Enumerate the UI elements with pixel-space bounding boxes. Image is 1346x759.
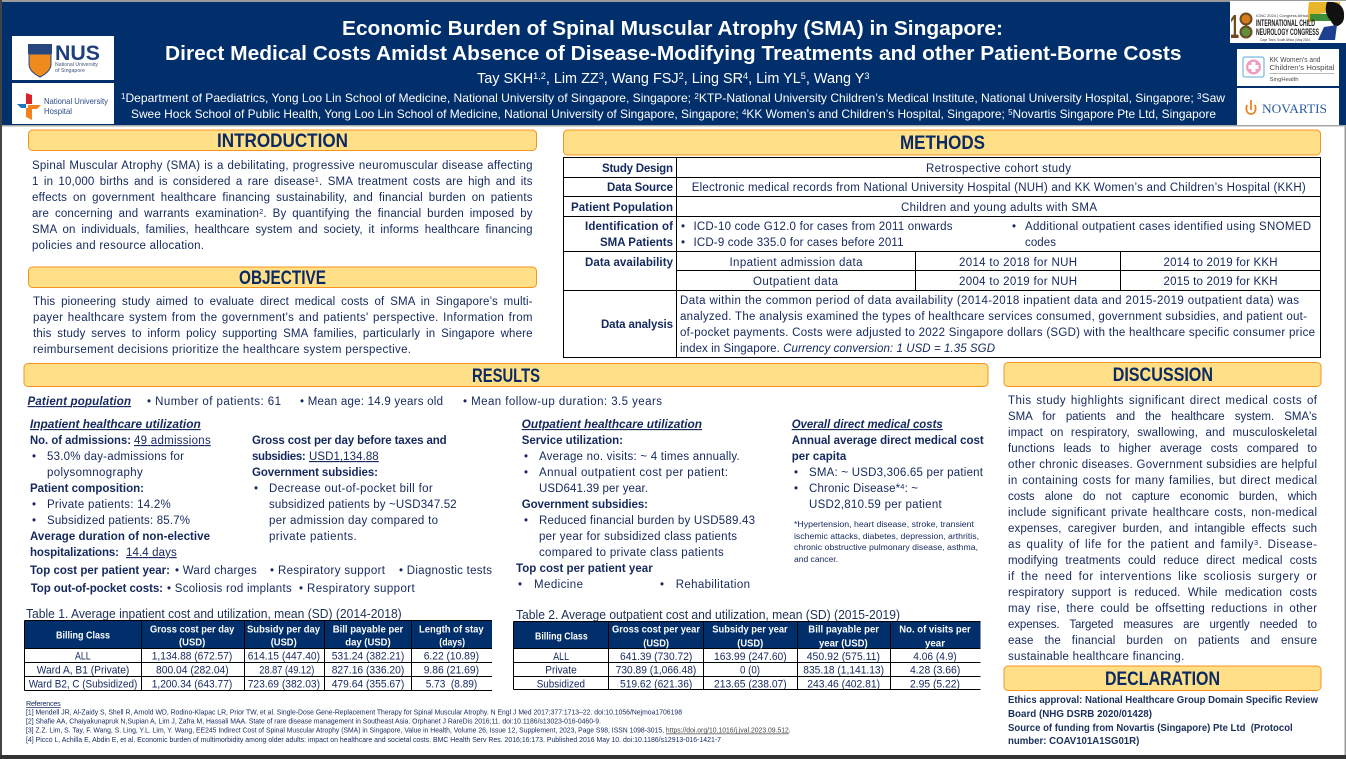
table 2: outpatient cost and utilization: 213.65 (238.07) xyxy=(714,678,787,690)
table 1: inpatient cost and utilization: 6.22 (10.89) xyxy=(424,650,479,662)
heading: results: RESULTS xyxy=(472,365,540,387)
heading: introduction xyxy=(28,130,536,152)
affiliations: Swee Hock School of Public Health, Yong Loo Lin School of Medicine, National University of Singapore, Singapore; xyxy=(131,107,743,121)
logo: International Child Neurology Congress: ICNC 2024 | Congress Africa xyxy=(1256,13,1309,18)
row: data analysis: Data analysis xyxy=(601,319,673,331)
table 1: inpatient cost and utilization: 28.87 (49.12) xyxy=(259,664,314,676)
text: introduction body: effects on government healthcare financing sustainability, and financial burden on patients xyxy=(32,192,533,204)
inpatient healthcare utilization: • xyxy=(32,451,36,463)
table 1: inpatient cost and utilization: 800.04 (282.04) xyxy=(156,664,229,676)
authors: 2 xyxy=(679,71,684,82)
heading: discussion xyxy=(1004,362,1321,386)
inpatient healthcare utilization: subsidies: xyxy=(252,451,306,463)
row: identification of SMA patients xyxy=(585,221,1311,249)
authors: , Lim ZZ xyxy=(546,70,599,87)
title xyxy=(165,17,1182,65)
logo: National University Hospital: Hospital xyxy=(44,106,72,116)
text: discussion body: ease the financial burden on patients and ensure xyxy=(1008,635,1317,647)
text: discussion body: other chronic diseases. Government subsidies are helpful xyxy=(1008,459,1317,471)
references xyxy=(26,699,791,744)
logo: National University Hospital: National University xyxy=(44,96,109,106)
inpatient healthcare utilization: Decrease out-of-pocket bill for xyxy=(269,483,433,495)
table 1: inpatient cost and utilization: 5.73 (8.89) xyxy=(426,678,477,690)
row: data availability: 2015 to 2019 for KKH xyxy=(1164,276,1278,288)
row: identification of SMA patients: ICD-10 code G12.0 for cases from 2011 onwards xyxy=(694,221,953,233)
table 2: outpatient cost and utilization: 835.18 (1,141.13) xyxy=(803,664,884,676)
overall direct medical costs: : ~ xyxy=(905,483,918,495)
outpatient healthcare utilization: Average no. visits: ~ 4 times annually. xyxy=(539,451,740,463)
table 2: outpatient cost and utilization: Billing Class xyxy=(535,630,588,642)
table 2: outpatient cost and utilization: Bill payable per xyxy=(808,624,879,636)
patient population summary xyxy=(28,396,662,408)
footnote: chronic diseases xyxy=(794,519,979,564)
row: data analysis: index in Singapore. Currency conversion: 1 USD = 1.35 SGD xyxy=(680,343,995,355)
row: identification of SMA patients: ICD-9 code 335.0 for cases before 2011 xyxy=(694,237,904,249)
outpatient healthcare utilization: USD641.39 per year. xyxy=(539,483,648,495)
affiliations: 3 xyxy=(1197,92,1202,101)
authors: 1,2 xyxy=(533,71,546,82)
heading: methods: METHODS xyxy=(900,132,985,154)
table 1: inpatient cost and utilization: 1,134.88 (672.57) xyxy=(152,650,232,662)
inpatient healthcare utilization: hospitalizations: xyxy=(30,547,119,559)
row: data source: Data Source xyxy=(607,182,673,194)
row: identification of SMA patients: Identification of xyxy=(585,221,673,233)
affiliations: Department of Paediatrics, Yong Loo Lin School of Medicine, National University of Singapore, Singapore; xyxy=(125,91,694,105)
table 2: outpatient cost and utilization: Private xyxy=(545,664,577,676)
text: introduction body: SMA on individuals, families, healthcare system and society, it informs healthcare financing xyxy=(32,224,532,236)
header banner xyxy=(2,1,1346,126)
text: introduction body: policies and resource allocation. xyxy=(32,240,204,252)
authors: 3 xyxy=(864,71,870,82)
text: discussion body: expenses. Targeted measures are urgently needed to xyxy=(1008,619,1317,631)
outpatient healthcare utilization: Service utilization: xyxy=(522,435,623,447)
logo: NUS xyxy=(12,36,114,80)
text: objective body xyxy=(33,296,533,356)
heading: objective: OBJECTIVE xyxy=(239,267,326,289)
row: patient population xyxy=(571,202,1097,214)
inpatient healthcare utilization: 53.0% day-admissions for xyxy=(47,451,184,463)
text: discussion body: may rise, there could be offsetting reductions in other xyxy=(1008,603,1317,615)
table 1: inpatient cost and utilization: 723.69 (382.03) xyxy=(248,678,320,690)
row: data availability: 2014 to 2019 for KKH xyxy=(1164,257,1278,269)
outpatient healthcare utilization: per year for subsidized class patients xyxy=(539,531,737,543)
panel: introduction xyxy=(28,130,536,252)
inpatient healthcare utilization: subsidized patients by ~USD347.52 xyxy=(269,499,457,511)
logo: KK Women's and Children's Hospital: SingHealth xyxy=(1270,77,1298,83)
footnote: chronic diseases: and cancer. xyxy=(794,554,838,564)
overall direct medical costs: USD2,810.59 per patient xyxy=(809,499,942,511)
overall direct medical costs: • xyxy=(794,483,798,495)
row: data analysis: of-pocket payments. Costs were adjusted to 2022 Singapore dollars (SGD) with the healthcare specific consumer price xyxy=(680,327,1315,339)
outpatient healthcare utilization: Outpatient healthcare utilization xyxy=(522,419,702,431)
table 2: outpatient cost and utilization: 519.62 (621.36) xyxy=(620,678,692,690)
inpatient healthcare utilization xyxy=(30,419,492,595)
row: data availability: Inpatient admission data xyxy=(730,257,863,269)
table 1: inpatient cost and utilization: (USD) xyxy=(271,636,297,648)
row: study design xyxy=(602,163,1071,175)
row: data availability xyxy=(585,257,1278,288)
logo: NUS: of Singapore xyxy=(55,68,85,74)
table 2: outpatient cost and utilization: (USD) xyxy=(737,638,763,650)
references: [1] Mendell JR, Al-Zaidy S, Shell R, Arnold WD, Rodino-Klapac LR, Prior TW, et al. Single-Dose Gene-Replacement Therapy for Spinal Muscular Atrophy. N Engl J Med 2017;377:1713–22. doi:10.1056/Nejmoa1706198 xyxy=(26,708,682,716)
overall direct medical costs: per capita xyxy=(792,451,847,463)
affiliations: KTP-National University Children’s Medical Institute, National University Hospital, Singapore; xyxy=(699,91,1197,105)
table 1: inpatient cost and utilization: Ward A, B1 (Private) xyxy=(37,664,129,676)
text: objective body: this study serves to inform policy supporting SMA families, particularly in Singapore where xyxy=(33,328,532,340)
patient population summary: Patient population xyxy=(28,396,131,408)
table 1: inpatient cost and utilization: 531.24 (382.21) xyxy=(332,650,404,662)
table 2: outpatient cost and utilization: (USD) xyxy=(643,638,669,650)
panel: declaration xyxy=(1004,666,1321,747)
outpatient healthcare utilization: • xyxy=(524,467,528,479)
text: discussion body: functions leads to higher average costs compared to xyxy=(1008,443,1317,455)
overall direct medical costs: Chronic Disease* xyxy=(809,483,900,495)
table 2: outpatient cost and utilization: 163.99 (247.60) xyxy=(714,651,787,663)
row: data analysis xyxy=(601,295,1315,355)
overall direct medical costs: 4 xyxy=(900,482,904,491)
inpatient healthcare utilization: • Scoliosis rod implants xyxy=(167,583,292,595)
row: identification of SMA patients: codes xyxy=(1025,237,1056,249)
table 2: outpatient cost and utilization: 641.39 (730.72) xyxy=(620,651,692,663)
authors: , Wang FSJ xyxy=(604,70,679,87)
table 2: outpatient cost and utilization: ALL xyxy=(553,651,569,663)
authors: , Ling SR xyxy=(684,70,743,87)
overall direct medical costs: • xyxy=(794,467,798,479)
text: discussion body: expenses, caregiver burden, and intangible effects such xyxy=(1008,523,1317,535)
affiliations: 1 xyxy=(121,92,126,101)
text: objective body: reimbursement decisions prioritize the healthcare system perspective. xyxy=(33,344,411,356)
text: discussion body xyxy=(1008,395,1318,663)
inpatient healthcare utilization: No. of admissions: xyxy=(30,435,131,447)
text: discussion body: respiratory support is reduced. While medication costs xyxy=(1008,587,1317,599)
heading: introduction: INTRODUCTION xyxy=(217,130,348,152)
table 2: outpatient cost and utilization: 4.28 (3.66) xyxy=(910,664,960,676)
logo: International Child Neurology Congress: 1 xyxy=(1230,8,1239,45)
text: discussion body: sustainable healthcare financing. xyxy=(1008,651,1184,663)
row: data availability: 2014 to 2018 for NUH xyxy=(959,257,1077,269)
inpatient healthcare utilization: • xyxy=(32,515,36,527)
panel: discussion xyxy=(1004,362,1321,663)
patient population summary: • Number of patients: 61 xyxy=(147,396,281,408)
row: patient population: Patient Population xyxy=(571,202,673,214)
logo: NUS: NUS xyxy=(55,42,100,65)
table 1: inpatient cost and utilization: Ward B2, C (Subsidized) xyxy=(29,678,137,690)
row: data source: Electronic medical records from National University Hospital (NUH) and KK Women’s and Children’s Hospital (KKH) xyxy=(692,182,1306,194)
references: References xyxy=(26,699,61,708)
table 1: inpatient cost and utilization: (days) xyxy=(439,636,465,648)
overall direct medical costs: Overall direct medical costs xyxy=(792,419,943,431)
table 1: inpatient cost and utilization: Table 1. Average inpatient cost and utilization, mean (SD) (2014-2018) xyxy=(26,607,402,621)
overall direct medical costs xyxy=(792,419,984,564)
inpatient healthcare utilization: private patients. xyxy=(269,531,357,543)
panel: results xyxy=(24,364,988,690)
table 2: outpatient cost and utilization: Subsidized xyxy=(537,678,585,690)
text: introduction body: 1 xyxy=(315,175,319,184)
inpatient healthcare utilization: polysomnography xyxy=(47,467,143,479)
text: introduction body: . By quantifying the financial burden imposed by xyxy=(263,208,533,220)
text: discussion body: 3 xyxy=(1254,538,1258,547)
text: discussion body: . Disease- xyxy=(1259,539,1317,551)
table 1: inpatient cost and utilization: day (USD) xyxy=(345,636,391,648)
text: introduction body: are concerning and warrants examination xyxy=(32,208,259,220)
logo: National University Hospital xyxy=(12,83,114,124)
affiliations: KK Women’s and Children’s Hospital, Singapore; xyxy=(746,107,1008,121)
outpatient healthcare utilization: Government subsidies: xyxy=(522,499,648,511)
text: declaration body: Ethics approval: National Healthcare Group Domain Specific Review xyxy=(1008,695,1318,706)
row: identification of SMA patients: • xyxy=(681,221,685,233)
panel: methods xyxy=(564,130,1320,358)
inpatient healthcare utilization: Average duration of non-elective xyxy=(30,531,210,543)
table 2: outpatient cost and utilization: No. of visits per xyxy=(899,624,971,636)
table 1: inpatient cost and utilization: 827.16 (336.20) xyxy=(332,664,404,676)
outpatient healthcare utilization: • xyxy=(524,515,528,527)
row: identification of SMA patients: • xyxy=(681,237,685,249)
table 2: outpatient cost and utilization xyxy=(514,608,980,690)
text: declaration body: number: COAV101A1SG01R) xyxy=(1008,736,1139,747)
patient population summary: • Mean age: 14.9 years old xyxy=(300,396,443,408)
text: discussion body: in containing costs for many families, but direct medical xyxy=(1008,475,1317,487)
text: declaration body: Source of funding from Novartis (Singapore) Pte Ltd (Protocol xyxy=(1008,723,1293,734)
text: objective body: This pioneering study aimed to evaluate direct medical costs of SMA in Singapore’s multi- xyxy=(33,296,533,308)
text: discussion body: modifying treatments could reduce direct medical costs xyxy=(1008,555,1317,567)
overall direct medical costs: Annual average direct medical cost xyxy=(792,435,984,447)
inpatient healthcare utilization: 14.4 days xyxy=(126,547,177,559)
logo: Novartis xyxy=(1237,88,1339,125)
table 2: outpatient cost and utilization: 0 (0) xyxy=(740,664,760,676)
inpatient healthcare utilization: • xyxy=(254,483,258,495)
patient population summary: • Mean follow-up duration: 3.5 years xyxy=(463,396,662,408)
heading: methods xyxy=(564,130,1320,155)
references: [3] Z.Z. Lim, S. Tay, F. Wang, S. Ling, Y.L. Lim, Y. Wang, EE245 Indirect Cost of Spinal Muscular Atrophy (SMA) in Singapore, Value in Health, Volume 26, Issue 12, Supplement, 2023, Page S98, ISSN 1098-3015, https://doi.org/10.1016/j.jval.2023.09.512. xyxy=(26,726,791,734)
outpatient healthcare utilization: compared to private class patients xyxy=(539,547,724,559)
outpatient healthcare utilization: • xyxy=(524,451,528,463)
row: identification of SMA patients: • xyxy=(1012,221,1016,233)
affiliations: 2 xyxy=(694,92,699,101)
logo: International Child Neurology Congress xyxy=(1230,1,1346,45)
table 1: inpatient cost and utilization: 614.15 (447.40) xyxy=(248,650,320,662)
text: discussion body: if the need for interventions like scoliosis surgery or xyxy=(1008,571,1317,583)
table 1: inpatient cost and utilization: ALL xyxy=(75,650,91,662)
table 2: outpatient cost and utilization: 243.46 (402.81) xyxy=(807,678,880,690)
affiliations: Novartis Singapore Pte Ltd, Singapore xyxy=(1013,107,1216,121)
logo: KK Women's and Children's Hospital xyxy=(1237,49,1339,86)
table 1: inpatient cost and utilization: 479.64 (355.67) xyxy=(332,678,404,690)
outpatient healthcare utilization: Annual outpatient cost per patient: xyxy=(539,467,728,479)
table 2: outpatient cost and utilization: year (USD) xyxy=(819,638,868,650)
table 2: outpatient cost and utilization: Gross cost per year xyxy=(612,624,700,636)
authors: 4 xyxy=(743,71,748,82)
outpatient healthcare utilization: • xyxy=(518,579,522,591)
logo: KK Women's and Children's Hospital: Children's Hospital xyxy=(1270,63,1335,72)
table 1: inpatient cost and utilization: Subsidy per day xyxy=(247,624,320,636)
row: patient population: Children and young adults with SMA xyxy=(901,202,1097,214)
outpatient healthcare utilization xyxy=(516,419,755,591)
inpatient healthcare utilization: Inpatient healthcare utilization xyxy=(30,419,201,431)
title: Direct Medical Costs Amidst Absence of Disease-Modifying Treatments and other Patient-Borne Costs xyxy=(165,42,1182,65)
table 2: outpatient cost and utilization: 4.06 (4.9) xyxy=(913,651,957,663)
affiliations: Saw xyxy=(1202,91,1225,105)
table 1: inpatient cost and utilization xyxy=(24,607,492,690)
inpatient healthcare utilization: • Respiratory support xyxy=(270,565,386,577)
heading: discussion: DISCUSSION xyxy=(1113,364,1213,386)
references: [2] Shafie AA, Chaiyakunapruk N,Supian A, Lim J, Zafra M, Hassali MAA. State of rare disease management in Southeast Asia. Orphanet J RareDis 2016;11. doi:10.1186/s13023-016-0460-9. xyxy=(26,716,601,726)
inpatient healthcare utilization: Patient composition: xyxy=(30,483,144,495)
row: identification of SMA patients: SMA Patients xyxy=(600,237,673,249)
inpatient healthcare utilization: • Respiratory support xyxy=(299,583,415,595)
table 1: inpatient cost and utilization: (USD) xyxy=(179,636,205,648)
text: discussion body: This study highlights significant direct medical costs of xyxy=(1008,395,1318,407)
authors: , Lim YL xyxy=(748,70,801,87)
table 2: outpatient cost and utilization: 450.92 (575.11) xyxy=(807,651,880,663)
methods table xyxy=(564,158,1320,358)
text: discussion body: include significant private healthcare costs, non-medical xyxy=(1008,507,1317,519)
text: discussion body: SMA for patients and the healthcare system. SMA's xyxy=(1008,411,1317,423)
footnote: chronic diseases: *Hypertension, heart disease, stroke, transient xyxy=(794,519,975,529)
inpatient healthcare utilization: Top out-of-pocket costs: xyxy=(31,583,163,595)
text: introduction body: 1 in 10,000 births and is considered a rare disease xyxy=(32,176,315,188)
heading: objective xyxy=(28,267,536,289)
row: study design: Retrospective cohort study xyxy=(926,163,1071,175)
affiliations: 4 xyxy=(742,108,747,117)
logo: International Child Neurology Congress: Cape Town, South Africa | May 2024 xyxy=(1260,37,1311,42)
logo: KK Women's and Children's Hospital: KK Women's and xyxy=(1270,55,1320,64)
table 1: inpatient cost and utilization: 9.86 (21.69) xyxy=(424,664,479,676)
table 2: outpatient cost and utilization: year xyxy=(925,638,945,650)
footnote: chronic diseases: chronic obstructive pulmonary disease, asthma, xyxy=(794,542,978,552)
inpatient healthcare utilization: Gross cost per day before taxes and xyxy=(252,435,447,447)
row: data analysis: Data within the common period of data availability (2014-2018 inpatient data and 2015-2019 outpatient data) was xyxy=(680,295,1299,307)
inpatient healthcare utilization: Subsidized patients: 85.7% xyxy=(47,515,190,527)
table 1: inpatient cost and utilization: Length of stay xyxy=(419,624,484,636)
inpatient healthcare utilization: 49 admissions xyxy=(134,435,211,447)
table 1: inpatient cost and utilization: Bill payable per xyxy=(333,624,403,636)
outpatient healthcare utilization: Top cost per patient year xyxy=(516,563,653,575)
heading: declaration xyxy=(1004,666,1321,690)
table 2: outpatient cost and utilization: 2.95 (5.22) xyxy=(910,678,960,690)
text: declaration body xyxy=(1008,695,1318,747)
text: introduction body xyxy=(32,160,533,252)
references: [4] Picco L, Achilla E, Abdin E, et al. Economic burden of multimorbidity among older adults: impact on healthcare and societal costs. BMC Health Serv Res. 2016;16:173. Published 2016 May 10. doi:10.1186/s12913-016-1421-7 xyxy=(26,735,721,744)
text: introduction body: Spinal Muscular Atrophy (SMA) is a debilitating, progressive neuromuscular disease affecting xyxy=(32,160,532,172)
affiliations xyxy=(121,91,1225,121)
table 1: inpatient cost and utilization: 1,200.34 (643.77) xyxy=(152,678,232,690)
text: declaration body: Board (NHG DSRB 2020/01428) xyxy=(1008,709,1152,720)
text: discussion body: impact on respiratory, swallowing, and musculoskeletal xyxy=(1008,427,1317,439)
inpatient healthcare utilization: Government subsidies: xyxy=(252,467,378,479)
row: study design: Study Design xyxy=(602,163,673,175)
row: data availability: Outpatient data xyxy=(753,276,839,288)
logo: Novartis: NOVARTIS xyxy=(1262,101,1327,116)
table 1: inpatient cost and utilization: Billing Class xyxy=(56,630,110,642)
inpatient healthcare utilization: Top cost per patient year: xyxy=(30,565,170,577)
inpatient healthcare utilization: • Diagnostic tests xyxy=(399,565,492,577)
text: discussion body: as quality of life for the patient and family xyxy=(1008,539,1253,551)
table 2: outpatient cost and utilization: 730.89 (1,066.48) xyxy=(616,664,696,676)
authors: 3 xyxy=(599,71,604,82)
text: objective body: payer healthcare system from the government's and patients' perspective. Information from xyxy=(33,312,532,324)
logo: NUS: National University xyxy=(55,62,99,68)
overall direct medical costs: SMA: ~ USD3,306.65 per patient xyxy=(809,467,984,479)
text: introduction body: . SMA treatment costs are high and its xyxy=(319,176,533,188)
authors: , Wang Y xyxy=(806,70,864,87)
heading: declaration: DECLARATION xyxy=(1105,668,1220,690)
text: introduction body: 2 xyxy=(259,207,263,216)
outpatient healthcare utilization: Reduced financial burden by USD589.43 xyxy=(539,515,755,527)
table 2: outpatient cost and utilization: Table 2. Average outpatient cost and utilization, mean (SD) (2015-2019) xyxy=(516,608,900,622)
row: identification of SMA patients: Additional outpatient cases identified using SNOMED xyxy=(1025,221,1311,233)
authors: 5 xyxy=(801,71,806,82)
outpatient healthcare utilization: Rehabilitation xyxy=(676,579,750,591)
inpatient healthcare utilization: USD1,134.88 xyxy=(309,451,379,463)
text: discussion body: costs alone do not capture economic burden, which xyxy=(1008,491,1317,503)
authors: Tay SKH xyxy=(477,70,535,87)
inpatient healthcare utilization: Private patients: 14.2% xyxy=(47,499,171,511)
footnote: chronic diseases: ischemic attacks, diabetes, depression, arthritis, xyxy=(794,531,979,541)
title: Economic Burden of Spinal Muscular Atrophy (SMA) in Singapore: xyxy=(342,17,1003,40)
heading: results xyxy=(24,364,988,387)
inpatient healthcare utilization: per admission day compared to xyxy=(269,515,438,527)
panel: objective xyxy=(28,267,536,356)
table 1: inpatient cost and utilization: Gross cost per day xyxy=(150,624,234,636)
row: data availability: Data availability xyxy=(585,257,674,269)
table 2: outpatient cost and utilization: Subsidy per year xyxy=(712,624,788,636)
inpatient healthcare utilization: • Ward charges xyxy=(175,565,257,577)
affiliations: 5 xyxy=(1008,108,1013,117)
row: data availability: 2004 to 2019 for NUH xyxy=(959,276,1077,288)
row: data analysis: analyzed. The analysis examined the types of healthcare services consumed, government subsidies, and patient out- xyxy=(680,311,1307,323)
outpatient healthcare utilization: • xyxy=(660,579,664,591)
outpatient healthcare utilization: Medicine xyxy=(534,579,583,591)
inpatient healthcare utilization: • xyxy=(32,499,36,511)
